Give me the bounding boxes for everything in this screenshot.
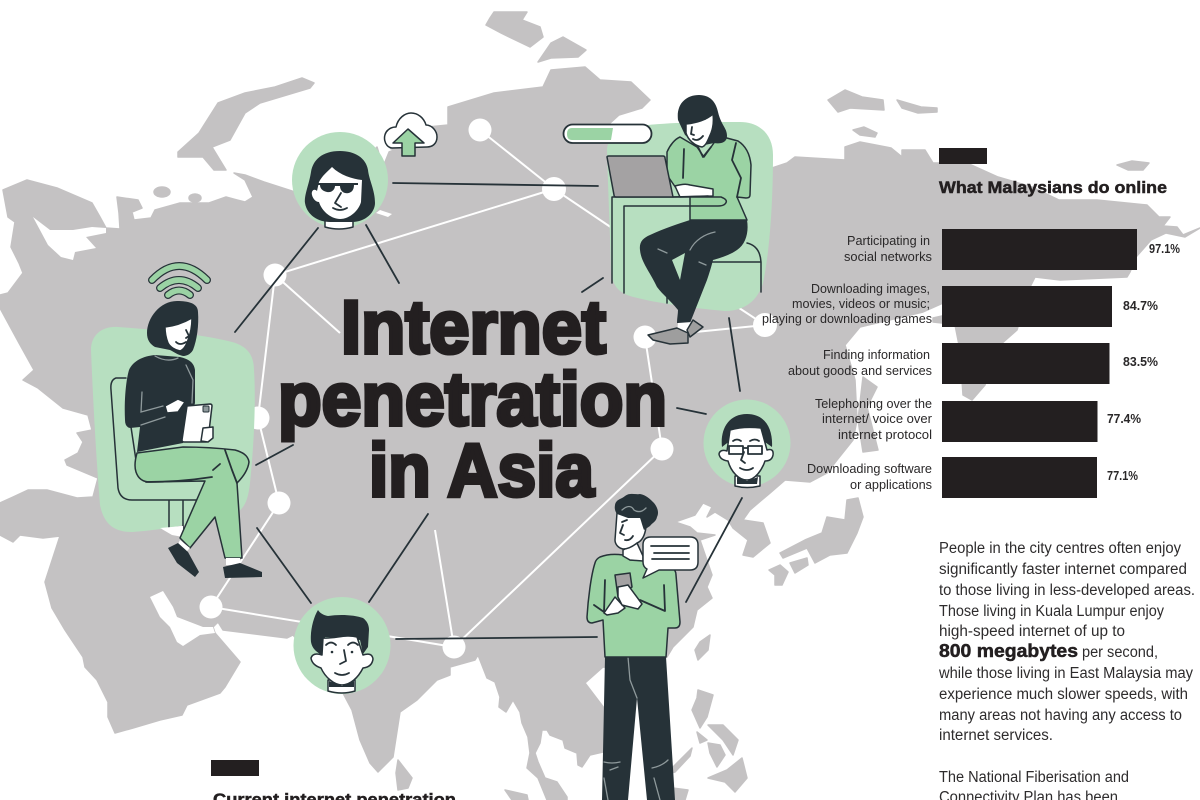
body text: per second, [1082, 644, 1158, 661]
connector lines between people [235, 183, 742, 639]
bar: finding information: about goods and services [788, 364, 932, 378]
title: penetration [278, 357, 667, 441]
body text: while those living in East Malaysia may [938, 665, 1193, 682]
icon: progress bar [564, 124, 652, 143]
bar: social networks: Participating in [847, 234, 930, 248]
avatar: man with glasses [704, 400, 790, 488]
map water bodies [33, 144, 392, 646]
bar: finding information: 83.5% [1123, 355, 1158, 369]
bar: downloading software: Downloading software [807, 462, 932, 476]
title: in Asia [369, 428, 595, 512]
network lines and nodes [200, 118, 777, 658]
avatar: woman with sunglasses [292, 132, 388, 229]
bar: downloading media [762, 282, 1158, 327]
body text: to those living in less-developed areas. [939, 582, 1195, 599]
bar: social networks: 97.1% [1149, 242, 1180, 256]
bar: downloading media: movies, videos or music; [792, 297, 930, 311]
body text: experience much slower speeds, with [939, 686, 1188, 703]
bar: downloading media: Downloading images, [811, 282, 930, 296]
body text [938, 540, 1195, 800]
bar: social networks [844, 229, 1180, 270]
title [278, 285, 667, 512]
legend bar: what Malaysians do online [939, 148, 987, 164]
bar: telephoning: internet protocol [838, 428, 932, 442]
bar: telephoning: Telephoning over the [815, 397, 932, 411]
bar: social networks: social networks [844, 250, 932, 264]
bar: downloading media: 84.7% [1123, 299, 1158, 313]
legend bar: current internet penetration [211, 760, 259, 776]
body text: significantly faster internet compared [939, 561, 1187, 578]
bar: downloading media: playing or downloading games [762, 312, 932, 326]
figure: woman with tablet [91, 301, 262, 578]
bar: downloading software [807, 457, 1138, 498]
body text: many areas not having any access to [939, 707, 1182, 724]
body text: high-speed internet of up to [939, 623, 1125, 640]
figure: woman with laptop [607, 95, 773, 344]
body text: internet services. [939, 727, 1053, 744]
body text: 800 megabytes [939, 641, 1078, 661]
bar: downloading software: 77.1% [1107, 469, 1138, 483]
bar: telephoning [815, 397, 1141, 442]
icon: wifi signal [152, 266, 207, 295]
avatar: man with quiff [294, 597, 390, 694]
bar: finding information [788, 343, 1158, 384]
title: Internet [341, 285, 606, 369]
figure: man with phone [587, 494, 698, 800]
bar: telephoning: internet/ voice over [822, 412, 932, 426]
bar: telephoning: 77.4% [1107, 412, 1141, 426]
heading: what Malaysians do online: What Malaysians do online [939, 178, 1167, 197]
bar: finding information: Finding information [823, 348, 930, 362]
body text: People in the city centres often enjoy [939, 540, 1181, 557]
icon: cloud upload [385, 113, 437, 156]
bar: downloading software: or applications [850, 478, 932, 492]
bar chart: what Malaysians do online [762, 229, 1180, 498]
body text: Those living in Kuala Lumpur enjoy [939, 603, 1164, 620]
body text: The National Fiberisation and [939, 769, 1129, 786]
